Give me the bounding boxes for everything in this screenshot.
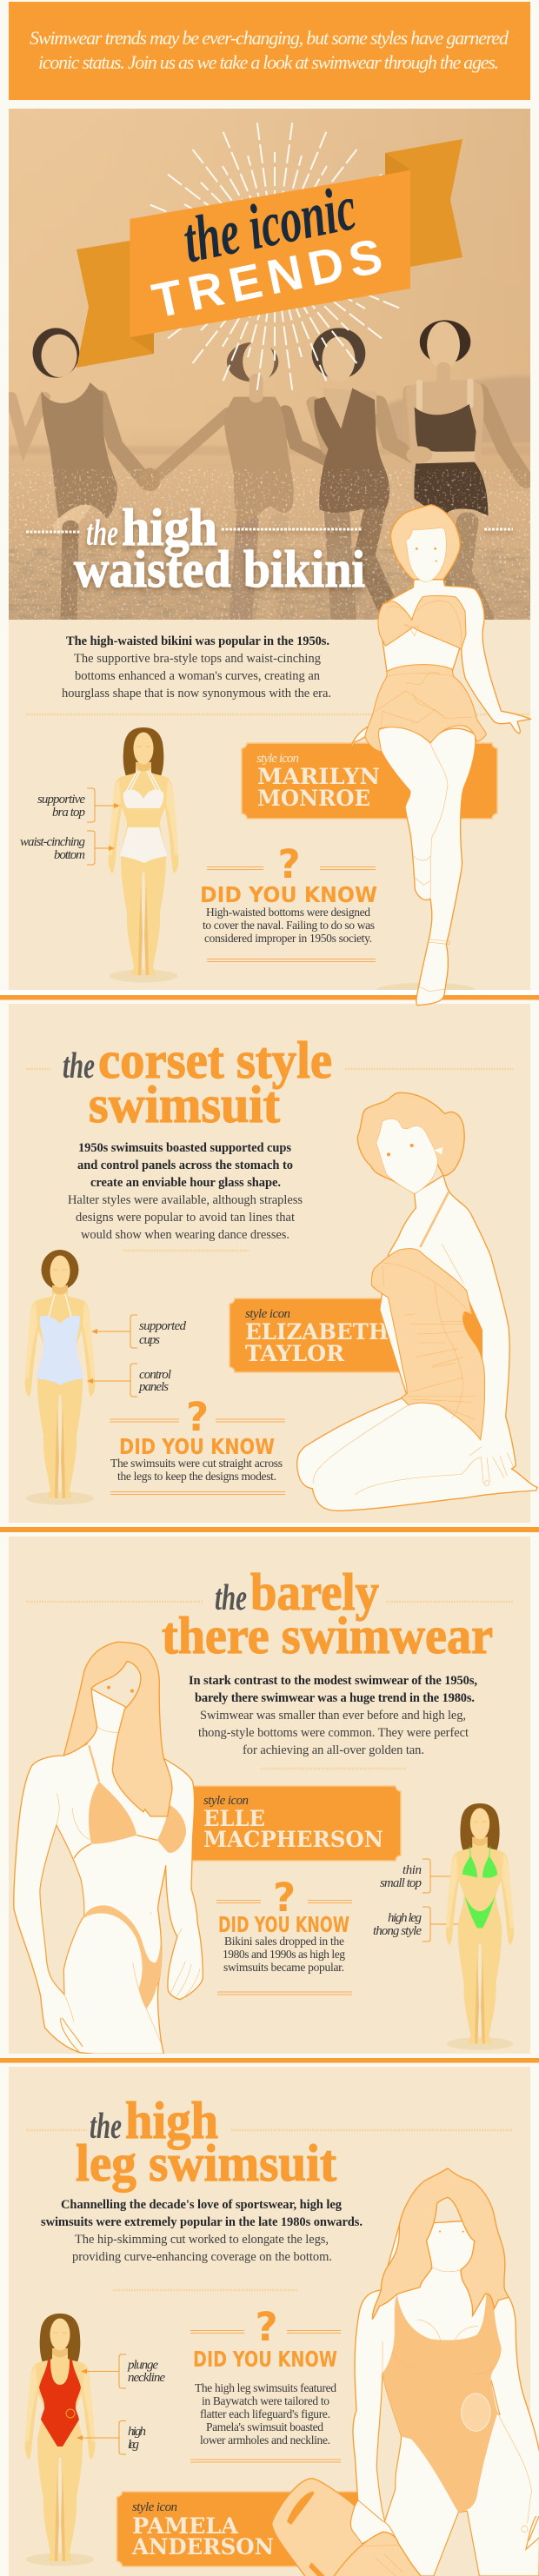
figure: barely there model [446,1803,514,2050]
text block: high leg: providing curve-enhancing coverage on the bottom. [72,2250,332,2264]
illustration: Pamela Anderson with rescue float [272,2168,539,2576]
heading: the high waisted bikini: high [122,499,217,556]
text block: high waisted bikini [26,634,530,714]
text block: corset style: Halter styles were available, although strapless [68,1193,303,1207]
heading: the high leg swimsuit [26,2092,513,2192]
did you know: barely there: DID YOU KNOW [218,1912,349,1937]
did you know: high waisted: High-waisted bottoms were designed [206,906,370,919]
ribbon banner with title: the iconic [177,172,362,277]
annotations: high leg: leg [128,2438,139,2452]
text block: high waisted bikini: The high-waisted bikini was popular in the 1950s. [66,634,329,648]
heading: the barely there swimwear: barely [250,1564,379,1621]
text block: barely there: thong-style bottoms were common. They were perfect [198,1726,469,1740]
did you know: high leg: Pamela's swimsuit boasted [206,2420,323,2433]
text block: corset style [68,1141,303,1251]
intro banner: Swimwear trends may be ever-changing, but some styles have garnered [30,27,509,49]
did you know: high waisted: considered improper in 1950s society. [204,932,372,945]
style icon: Marilyn Monroe [242,743,497,819]
sunburst rays [150,123,399,390]
annotations: corset style: panels [138,1380,169,1394]
text block: high waisted bikini: hourglass shape that is now synonymous with the era. [62,687,331,700]
style icon: Marilyn Monroe: MARILYN [257,764,380,789]
annotations: barely there: small top [380,1876,423,1890]
did you know: high leg: lower armholes and neckline. [200,2433,330,2447]
did you know: high waisted: DID YOU KNOW [200,882,377,907]
text block: high waisted bikini: bottoms enhanced a woman's curves, creating an [75,669,321,683]
style icon: Elle Macpherson: MACPHERSON [203,1827,383,1852]
did you know: high leg [190,2304,341,2462]
annotations: high waisted bikini [20,788,120,865]
did you know: high waisted [200,841,377,961]
did you know: high leg: flatter each lifeguard's figure. [200,2407,330,2420]
joined hands [145,468,160,491]
heading: the high waisted bikini [26,499,513,598]
text block: corset style: 1950s swimsuits boasted supported cups [78,1141,291,1155]
woman 3 [378,402,419,459]
did you know: barely there: 1980s and 1990s as high leg [223,1948,345,1961]
text block: barely there: In stark contrast to the modest swimwear of the 1950s, [189,1674,477,1688]
heading: the barely there swimwear [26,1564,513,1664]
annotations: high waisted bikini: bra top [52,806,85,820]
woman 4 [480,391,526,481]
figure: high leg model [25,2314,95,2566]
text block: high waisted bikini: The supportive bra-style tops and waist-cinching [74,652,321,666]
did you know: barely there: Bikini sales dropped in the [224,1935,344,1948]
text block: high leg: swimsuits were extremely popular in the late 1980s onwards. [41,2215,363,2229]
heading: the corset style swimsuit: corset style [98,1032,332,1089]
did you know: high leg: The high leg swimsuits featured [195,2381,336,2394]
heading: the corset style swimsuit: the [63,1046,95,1086]
annotations: corset style [87,1315,186,1397]
did you know: high leg: DID YOU KNOW [193,2347,337,2372]
heading: the high waisted bikini: the [86,514,118,554]
annotations: high waisted bikini: bottom [54,848,85,862]
annotations: barely there [373,1859,473,1942]
annotations: corset style: supported [139,1319,186,1333]
style icon: Marilyn Monroe: MONROE [257,786,370,811]
text block: corset style: and control panels across the stomach to [77,1159,293,1172]
annotations: barely there: thong style [373,1924,422,1938]
heading: the high waisted bikini: waisted bikini [74,541,365,598]
did you know: corset style [110,1394,285,1495]
heading: the barely there swimwear: there swimwear [162,1607,493,1664]
text block: high leg: Channelling the decade's love of sportswear, high leg [61,2198,343,2212]
illustration: Elle Macpherson [14,1642,203,2054]
ribbon banner with title: TRENDS [148,228,387,329]
annotations: corset style: cups [139,1333,160,1347]
text block: barely there: for achieving an all-over golden tan. [243,1743,424,1757]
text block: corset style: designs were popular to avoid tan lines that [76,1211,295,1225]
did you know: high leg: in Baywatch were tailored to [202,2394,329,2407]
annotations: high waisted bikini: supportive [37,793,85,807]
intro banner: iconic status. Join us as we take a look at swimwear through the ages. [38,51,499,73]
text block: corset style: would show when wearing dance dresses. [81,1228,289,1242]
annotations: high leg: high [128,2425,146,2439]
text block: barely there: Swimwear was smaller than ever before and high leg, [200,1709,466,1723]
woman 1 [11,397,44,445]
style icon: Pamela Anderson: style icon [132,2500,177,2514]
annotations: barely there: high leg [388,1911,423,1925]
style icon: Elle Macpherson: style icon [203,1794,249,1808]
did you know: corset style: the legs to keep the designs modest. [117,1470,276,1483]
did you know: high waisted: to cover the naval. Failing to do so was [203,919,375,932]
did you know: barely there: ? [273,1875,296,1921]
heading: the corset style swimsuit [26,1032,513,1133]
text block: high leg: The hip-skimming cut worked to elongate the legs, [75,2233,329,2247]
annotations: high waisted bikini: waist-cinching [20,835,85,849]
did you know: corset style: ? [186,1394,209,1440]
did you know: high waisted: ? [277,841,301,887]
did you know: barely there [216,1875,352,1995]
text block: high leg [41,2198,363,2290]
style icon: Pamela Anderson [116,2492,365,2566]
style icon: Elizabeth Taylor: style icon [245,1307,290,1321]
style icon: Pamela Anderson: PAMELA [132,2513,239,2539]
style icon: Elle Macpherson [187,1786,401,1861]
ribbon banner with title [77,139,462,368]
did you know: corset style: DID YOU KNOW [119,1434,275,1459]
annotations: high leg [77,2354,165,2454]
heading: the corset style swimsuit: swimsuit [89,1076,280,1133]
text block: barely there: barely there swimwear was a huge trend in the 1980s. [195,1691,475,1705]
illustration: Elizabeth Taylor [297,1092,537,1510]
heading: the high leg swimsuit: leg swimsuit [76,2134,336,2192]
figure: corset swimsuit model [25,1250,95,1505]
text block: barely there [189,1674,477,1769]
annotations: corset style: control [139,1368,171,1382]
annotations: barely there: thin [403,1863,422,1877]
annotations: high leg: plunge [127,2359,158,2373]
did you know: barely there: swimsuits became popular. [223,1961,344,1974]
did you know: corset style: The swimsuits were cut straight across [110,1457,283,1470]
style icon: Elle Macpherson: ELLE [203,1806,265,1831]
style icon: Elizabeth Taylor [230,1298,417,1372]
heading: the high leg swimsuit: high [125,2092,218,2149]
hero photo: four women running [9,109,538,620]
style icon: Marilyn Monroe: style icon [256,752,299,766]
heading: the barely there swimwear: the [215,1578,247,1618]
figure: high waisted bikini model [109,727,178,982]
style icon: Elizabeth Taylor: TAYLOR [245,1341,344,1366]
woman 2 [158,413,229,475]
heading: the high leg swimsuit: the [90,2107,122,2147]
did you know: high leg: ? [255,2304,278,2350]
illustration: Marilyn Monroe [350,505,531,1006]
style icon: Elizabeth Taylor: ELIZABETH [245,1319,389,1344]
intro banner [9,2,530,100]
text block: corset style: create an enviable hour glass shape. [90,1176,281,1190]
style icon: Pamela Anderson: ANDERSON [131,2534,274,2559]
annotations: high leg: neckline [128,2371,165,2385]
